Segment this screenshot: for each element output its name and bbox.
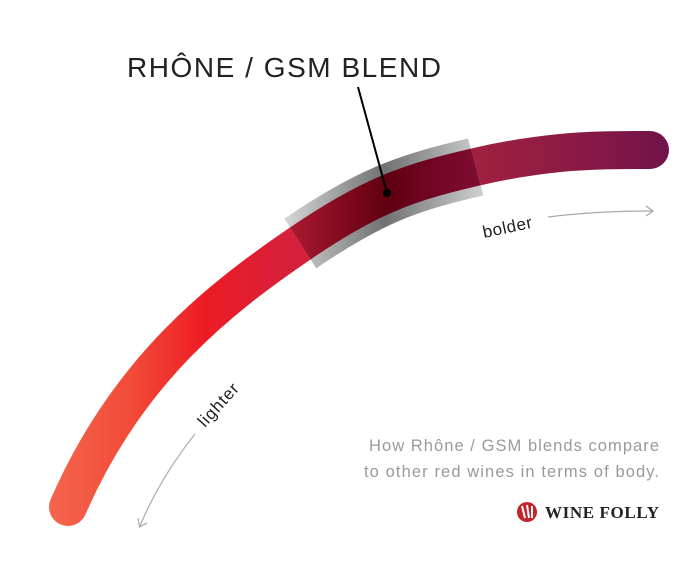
wine body curve xyxy=(68,150,650,507)
caption xyxy=(364,437,659,481)
title: RHÔNE / GSM BLEND xyxy=(127,52,441,83)
caption: How Rhône / GSM blends compare xyxy=(369,437,659,455)
highlight band: Rhône / GSM blend xyxy=(284,138,484,268)
bolder arrow xyxy=(548,206,653,217)
Wine Folly logo: WINE FOLLY xyxy=(545,503,659,522)
caption: to other red wines in terms of body. xyxy=(364,463,659,481)
pointer line xyxy=(358,87,391,197)
bolder label: bolder xyxy=(481,213,534,242)
lighter arrow xyxy=(138,434,195,527)
lighter label: lighter xyxy=(194,379,243,431)
infographic xyxy=(49,52,669,528)
